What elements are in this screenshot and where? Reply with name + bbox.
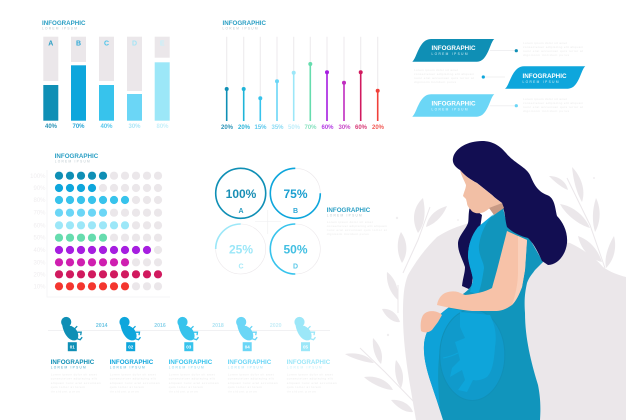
gauge caption: INFOGRAPHIC [327,208,371,214]
lollipop tracks [227,37,378,121]
gauge caption: nunc erat accumsan quis tortor at [327,228,387,232]
gauge caption: LOREM IPSUM [327,214,362,218]
step 04: tincidunt purus [228,389,257,393]
belly highlight [424,308,464,408]
ribbon paragraphs: nunc erat accumsan quis tortor at [523,49,583,53]
bar letters: B [76,40,81,48]
timeline years: 2016 [154,323,166,329]
lollipop percentages: 35% [271,125,284,131]
lollipop percentages: 20% [221,125,234,131]
dot matrix y labels: 30% [33,260,46,266]
step 05: tincidunt purus [287,389,316,393]
lollipop percentages: 60% [321,125,334,131]
step 02: Lorem ipsum dolor sit amet [110,372,156,376]
neck shadow [489,203,504,215]
step 05: consectetuer adipiscing elit [287,377,333,381]
gauge D 50%: D [293,264,298,270]
step 03 [169,317,219,393]
timeline years: 2018 [212,323,224,329]
ribbon paragraphs: nunc erat accumsan quis tortor at [523,105,583,109]
panel: bar chart A-E [42,21,170,130]
step 01: quis tortor at lorem [51,385,85,389]
gauge caption: Lorem ipsum dolor sit amet [327,220,373,224]
step 04: Lorem ipsum dolor sit amet [228,372,274,376]
ribbon 2: LOREM IPSUM [522,80,559,84]
lollipop heading: LOREM IPSUM [222,26,258,30]
step 02: INFOGRAPHIC [110,360,154,366]
ribbon paragraphs: dignissim tincidunt purus [523,109,570,113]
front hair lock [458,206,482,290]
dots: inactive [99,172,162,290]
bar percentages: 80% [156,124,169,130]
ribbon paragraphs: dignissim tincidunt purus [523,53,570,57]
gauge caption: dignissim tincidunt purus [327,232,369,236]
step 01: Lorem ipsum dolor sit amet [51,372,97,376]
ribbon dots [482,49,518,107]
step 02: consectetuer adipiscing elit [110,377,156,381]
illustration: pregnant woman scene [345,141,626,420]
lollipop percentages: 50% [288,125,301,131]
hair [453,141,567,265]
dress [424,208,543,420]
ribbon 2 [505,66,585,89]
dot matrix y labels [30,174,46,290]
timeline years [96,323,282,329]
lollipop heading [222,21,267,30]
dot matrix heading: INFOGRAPHIC [55,154,99,160]
face and neck [460,170,502,213]
lollipop percentages: 20% [372,125,385,131]
step 03: tincidunt purus [169,389,198,393]
gauge B 75% [270,168,320,218]
bar letters: D [132,40,137,48]
bar fills [43,62,170,121]
gauge C 25%: 25% [229,242,253,256]
bar letters: E [160,40,165,48]
bar percentages [45,124,169,130]
gauge B 75%: B [293,208,298,215]
step 03: INFOGRAPHIC [169,360,213,366]
step 04: LOREM IPSUM [228,366,263,370]
step 03: 03 [186,344,192,350]
step 04: 04 [245,344,250,350]
step 05: Lorem ipsum dolor sit amet [287,372,333,376]
dot matrix y labels: 40% [33,248,46,254]
step 02: aliquam nunc erat accumsan [110,381,160,385]
ribbon 1 [412,39,494,62]
gauge B 75%: 75% [283,187,308,201]
lollipop stems and dots [225,62,380,121]
lollipop percentages: 60% [355,125,368,131]
dot matrix axis [47,170,170,297]
ribbon paragraphs [414,41,584,113]
step 03: aliquam nunc erat accumsan [169,381,219,385]
lollipop percentages [221,125,385,131]
step 05: quis tortor at lorem [287,385,321,389]
ribbon paragraphs: Lorem ipsum dolor sit amet [523,97,567,101]
lollipop percentages: 20% [238,125,251,131]
gauge C 25% [216,224,266,274]
step 04: quis tortor at lorem [228,385,262,389]
bar percentages: 40% [45,124,58,130]
ribbon 2: INFOGRAPHIC [522,74,567,80]
lower hand [421,311,442,332]
ribbon 3: LOREM IPSUM [432,108,468,112]
gauge A 100%: 100% [226,187,257,201]
timeline years: 2014 [96,323,108,329]
step 04: aliquam nunc erat accumsan [228,381,278,385]
ribbon paragraphs: Lorem ipsum dolor sit amet [523,41,567,45]
gauge C 25%: C [238,264,244,270]
bar chart heading: LOREM IPSUM [42,26,77,30]
step 01 [51,317,101,393]
ribbon paragraphs: consectetuer adipiscing elit aliquam [414,72,474,76]
gauge caption [327,208,387,236]
step 04: consectetuer adipiscing elit [228,377,274,381]
step 01: aliquam nunc erat accumsan [51,381,101,385]
step 02: quis tortor at lorem [110,385,144,389]
dot matrix y labels: 50% [33,236,46,242]
ribbon paragraphs: consectetuer adipiscing elit aliquam [523,101,584,105]
ribbon 1: INFOGRAPHIC [432,46,476,52]
ribbon paragraphs: dignissim tincidunt purus [414,80,456,84]
bar percentages: 70% [72,124,85,130]
background leaves [345,167,615,412]
timeline years: 2020 [270,323,282,329]
ribbon paragraphs: consectetuer adipiscing elit aliquam [523,45,584,49]
step 01: 01 [70,344,75,350]
dots: active [55,172,162,290]
step 03: Lorem ipsum dolor sit amet [169,372,215,376]
small sparkles [387,177,595,336]
step 03: quis tortor at lorem [169,385,203,389]
step 01: consectetuer adipiscing elit [51,377,97,381]
bar percentages: 40% [100,124,113,130]
panel: donut gauges [216,168,387,274]
background blob [403,223,626,420]
dot matrix y labels: 90% [33,186,46,192]
bar tracks [43,37,170,91]
lollipop heading: INFOGRAPHIC [222,21,267,27]
step 05: 05 [303,344,308,350]
dot matrix y labels: 20% [33,272,46,278]
dot matrix y labels: 80% [33,198,46,204]
bar percentages: 30% [128,124,141,130]
arm highlight [512,236,527,305]
dot matrix y labels: 100% [30,174,46,180]
step 02 [110,317,160,393]
bar chart heading: INFOGRAPHIC [42,21,86,27]
panel: lollipop chart [221,21,385,131]
bar letters: C [104,40,109,48]
arm [437,231,527,311]
dot matrix heading: LOREM IPSUM [55,160,90,164]
bar letters [48,40,165,48]
gauge D 50% [270,224,320,274]
panel: ribbon labels [412,39,585,117]
step 05 [287,317,337,393]
panel: timeline [48,317,337,393]
step 04 [228,317,278,393]
ribbon paragraphs: Lorem ipsum dolor sit amet [414,68,458,72]
gauge A 100%: A [238,208,244,215]
ribbon 3 [412,94,494,117]
step 01: tincidunt purus [51,389,80,393]
step 05: LOREM IPSUM [287,366,322,370]
step 03: consectetuer adipiscing elit [169,377,215,381]
dress bright panel [468,213,495,294]
ribbon paragraphs: nunc erat accumsan quis tortor at [414,76,474,80]
lollipop percentages: 30% [338,125,351,131]
step 04: INFOGRAPHIC [228,360,272,366]
dot matrix y labels: 60% [33,223,46,229]
womb oval with fetus [440,310,505,400]
step 03: LOREM IPSUM [169,366,204,370]
step 02: tincidunt purus [110,389,139,393]
ribbon 3: INFOGRAPHIC [432,102,476,108]
step 05: INFOGRAPHIC [287,360,331,366]
gauge caption: consectetuer adipiscing elit aliquam [327,224,387,228]
dot matrix y labels: 70% [33,211,46,217]
gauge D 50%: 50% [283,242,308,256]
step 02: LOREM IPSUM [110,366,145,370]
step 01: INFOGRAPHIC [51,360,95,366]
step 05: aliquam nunc erat accumsan [287,381,337,385]
step 01: LOREM IPSUM [51,366,86,370]
lollipop percentages: 70% [304,125,317,131]
ribbon 1: LOREM IPSUM [432,52,468,56]
dot matrix y labels: 10% [33,284,46,290]
bar chart heading [42,21,86,30]
dot matrix heading [55,154,99,164]
step 02: 02 [128,344,134,350]
gauge A 100% [216,168,266,218]
ribbon connectors [485,50,516,106]
lollipop percentages: 15% [254,125,267,131]
bar letters: A [48,40,53,48]
panel: dot matrix [30,154,170,297]
